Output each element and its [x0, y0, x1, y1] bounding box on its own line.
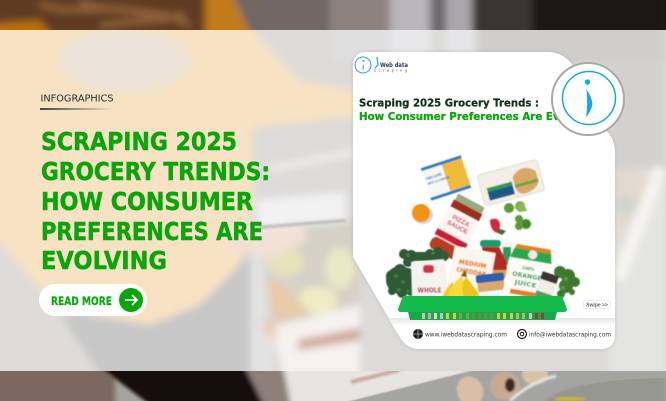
website contact: www.iwebdatascraping.com	[425, 332, 507, 338]
main title: HOW CONSUMER	[41, 187, 253, 216]
product: pizza sauce jar: PIZZA	[451, 214, 471, 229]
product: tomato jar	[480, 240, 513, 278]
heading label: infographics: INFOGRAPHICS	[40, 94, 114, 104]
main title: EVOLVING	[41, 246, 167, 275]
product: pizza sauce jar	[428, 193, 487, 262]
product: orange	[412, 204, 433, 224]
card title	[359, 98, 595, 123]
main title: GROCERY TRENDS:	[41, 157, 270, 186]
email contact: info@iwebdatascraping.com	[529, 332, 611, 338]
bottom photo band	[0, 371, 666, 401]
card logo	[355, 57, 408, 73]
main title: SCRAPING 2025	[41, 127, 237, 156]
product: orange juice carton: JUICE	[513, 278, 537, 290]
product: orange juice carton: 100%	[522, 265, 535, 272]
main title: PREFERENCES ARE	[41, 217, 263, 246]
swipe pill	[584, 300, 610, 308]
swipe pill: Swipe >>	[586, 302, 608, 308]
product: medium cheddar bag: CHEDDAR	[456, 265, 487, 278]
product: strawberry	[490, 219, 506, 235]
main title	[41, 127, 270, 275]
kale left	[386, 247, 449, 298]
product: peanut butter jar	[476, 273, 506, 301]
herbs right	[554, 266, 580, 298]
product: mac and cheese box	[421, 155, 471, 201]
card title: Scraping 2025 Grocery Trends :	[359, 98, 539, 110]
round logo badge	[552, 63, 624, 135]
product: medium cheddar bag	[447, 246, 496, 298]
social card	[353, 52, 615, 349]
website contact	[413, 329, 507, 339]
product: mac and cheese box: DELUXE	[425, 171, 443, 181]
product: sandwich tray	[477, 159, 545, 206]
card logo: Web data	[380, 62, 408, 69]
product: whole milk carton: WHOLE	[418, 286, 442, 294]
heading label: infographics	[40, 94, 114, 110]
product: mac and cheese box: MAC & CHEESE	[427, 175, 450, 186]
product: pizza sauce jar: SAUCE	[446, 219, 470, 236]
card title: How Consumer Preferences Are Evolving	[359, 111, 595, 123]
product: medium cheddar bag: MEDIUM	[458, 258, 487, 270]
product: bananas	[442, 270, 482, 298]
shopping basket	[398, 296, 567, 320]
product: spice jar	[534, 271, 559, 303]
read more button	[39, 284, 147, 316]
card footer strip	[388, 318, 615, 349]
product: orange juice carton: ORANGE	[511, 270, 542, 283]
card logo: scraping	[374, 68, 407, 72]
read more button: READ MORE	[51, 294, 112, 308]
top photo band	[0, 0, 666, 30]
product: whole milk carton	[411, 259, 447, 300]
email contact	[518, 330, 611, 338]
product: orange juice carton	[502, 243, 554, 306]
product: broccoli	[504, 201, 531, 230]
